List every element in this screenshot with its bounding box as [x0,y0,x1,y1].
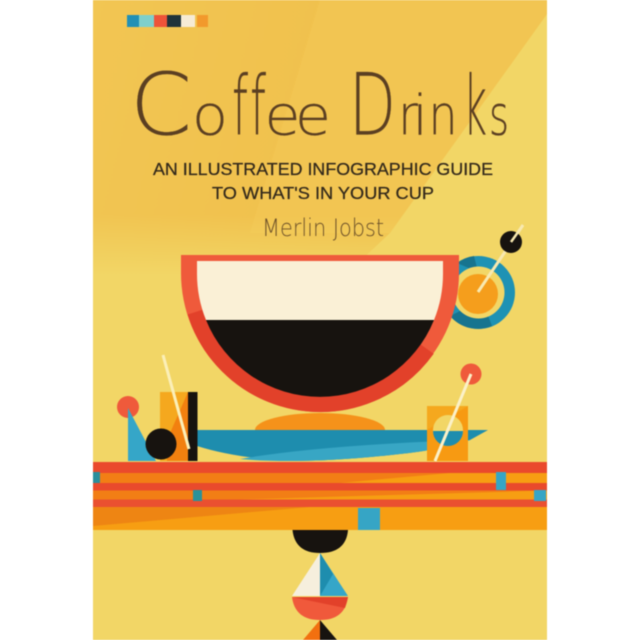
bottom stacked shapes [292,530,348,640]
title: o [192,84,228,148]
milk foam layer [197,261,443,320]
book cover illustration [92,0,548,640]
title: D [349,56,396,156]
title: f [250,60,266,154]
title: k [463,60,487,154]
coffee cup [181,255,459,412]
cover background [93,0,547,640]
left glass with straw [117,355,198,461]
teal blocks [93,472,100,483]
title: f [232,60,248,154]
title: n [428,84,458,148]
espresso layer [206,320,434,397]
right glass with stick [427,364,482,461]
title: r [398,84,418,148]
title [130,56,509,156]
cup handle [442,225,523,329]
title: e [264,84,300,148]
colour swatches [127,15,208,27]
striped table [93,462,547,530]
subtitle [153,159,493,203]
saucer dome [255,413,385,430]
title: i [412,84,428,148]
subtitle: AN ILLUSTRATED INFOGRAPHIC GUIDE [153,159,493,179]
title: s [489,84,509,148]
title: e [295,84,331,148]
title: C [130,56,192,156]
author: Merlin Jobst [262,214,384,242]
blue saucer [197,430,488,461]
subtitle: TO WHAT'S IN YOUR CUP [212,183,434,203]
